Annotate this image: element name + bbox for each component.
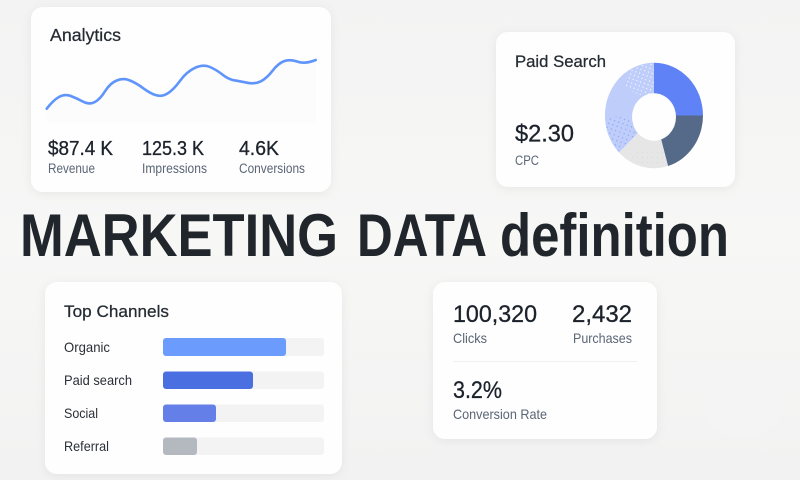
metric: conversion rate: 3.2% [453, 377, 502, 404]
heading: paid search: Paid Search [515, 52, 606, 71]
bar: organic: Organic [64, 339, 110, 355]
title: definition [500, 202, 729, 269]
metric: conversion rate: Conversion Rate [453, 406, 547, 422]
title [20, 202, 729, 269]
panel: analytics [31, 7, 331, 192]
panel: paid search [496, 32, 735, 187]
bar: social: Social [64, 405, 98, 421]
metric: impressions: Impressions [142, 161, 207, 176]
metric: purchases [572, 301, 632, 346]
metric: conversions: 4.6K [239, 138, 280, 160]
metric: revenue: $87.4 K [48, 138, 114, 160]
metric: conversions [239, 138, 305, 176]
bar: referral: Referral [64, 438, 109, 454]
metric: impressions: 125.3 K [142, 138, 205, 160]
metric: clicks [453, 301, 537, 346]
bar: paid search [64, 372, 324, 389]
bar: referral [64, 438, 324, 455]
title: DATA [357, 202, 487, 269]
metric: cpc [515, 120, 574, 168]
panel: top channels [45, 282, 342, 474]
metric: conversions: Conversions [239, 161, 305, 176]
heading: top channels: Top Channels [64, 302, 169, 321]
panel: key metrics [433, 282, 657, 439]
metric: purchases: 2,432 [572, 301, 632, 328]
bar: social [64, 404, 324, 422]
donut chart [605, 63, 703, 168]
line chart: revenue trend [47, 60, 316, 123]
metric: revenue: Revenue [48, 161, 95, 176]
metric: conversion rate [453, 377, 547, 422]
title: MARKETING [20, 202, 338, 269]
metric: cpc: CPC [515, 153, 539, 168]
metric: revenue [48, 138, 114, 176]
metric: impressions [142, 138, 207, 176]
metric: purchases: Purchases [573, 330, 632, 346]
metric: cpc: $2.30 [515, 120, 574, 148]
bar: organic [64, 338, 324, 356]
metric: clicks: Clicks [453, 330, 487, 346]
heading: analytics: Analytics [50, 25, 121, 45]
bar: paid search: Paid search [64, 372, 132, 388]
metric: clicks: 100,320 [453, 301, 537, 328]
